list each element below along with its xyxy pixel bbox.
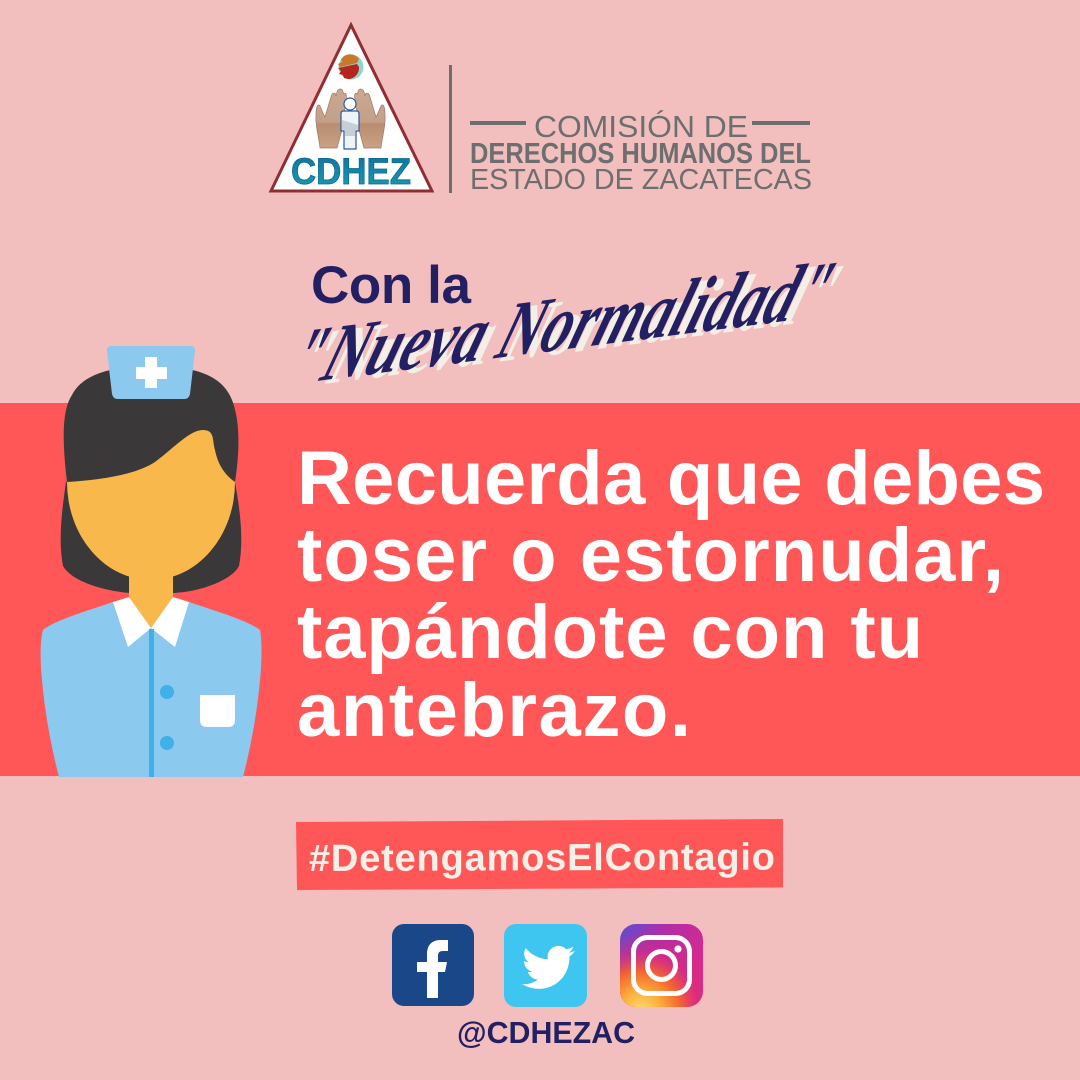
icon: twitter: [504, 924, 587, 1007]
main message: Recuerda que debes: [297, 436, 1045, 521]
main message: tapándote con tu: [297, 590, 923, 675]
icon: instagram: [620, 924, 703, 1007]
red band: [0, 403, 1080, 776]
logo divider: [449, 65, 452, 193]
main message: toser o estornudar,: [297, 513, 1004, 598]
organisation name: ESTADO DE ZACATECAS: [470, 164, 812, 196]
logo wordmark: CDHEZ: [291, 151, 411, 192]
hashtag banner: #DetengamosElContagio: [309, 837, 775, 880]
main message: antebrazo.: [297, 668, 691, 753]
heading: Con la: Con la: [311, 256, 472, 315]
illustration: nurse: [41, 346, 262, 777]
main message: [297, 436, 1045, 753]
organisation name: COMISIÓN DE: [534, 109, 748, 144]
hashtag banner: [296, 819, 783, 890]
icon: facebook: [392, 924, 474, 1006]
social handle: @CDHEZAC: [457, 1015, 635, 1050]
organisation name: DERECHOS HUMANOS DEL: [470, 138, 811, 170]
heading: script Nueva Normalidad: "Nueva Normalidad": [286, 245, 855, 406]
heading: script Nueva Normalidad: "Nueva Normalidad": [279, 242, 848, 403]
organisation name: [470, 109, 812, 196]
logo: CDHEZ triangle emblem: [271, 25, 432, 192]
